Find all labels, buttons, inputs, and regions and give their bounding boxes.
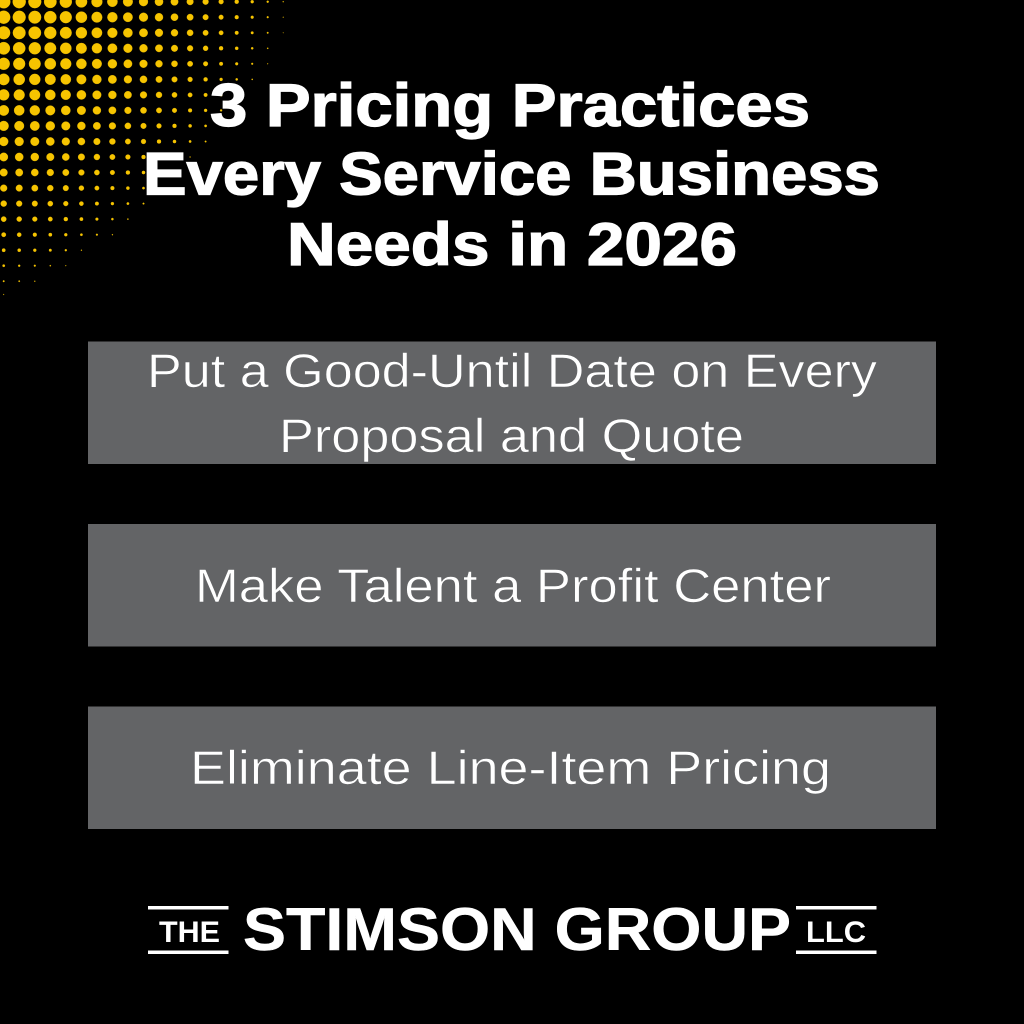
title: Needs in 2026 — [287, 211, 737, 278]
logo: The Stimson Group LLC: STIMSON GROUP — [243, 896, 791, 963]
halftone dot pattern — [0, 0, 284, 295]
title: Every Service Business — [143, 140, 880, 208]
logo: The Stimson Group LLC: THE — [159, 916, 220, 949]
panel: practice 3: Eliminate Line-Item Pricing — [190, 741, 831, 794]
panel: practice 1 — [88, 342, 936, 464]
title: 3 Pricing Practices — [210, 72, 810, 139]
panel: practice 1: Proposal and Quote — [279, 409, 744, 462]
panel: practice 3 — [88, 706, 936, 829]
logo: The Stimson Group LLC: LLC — [806, 916, 866, 949]
title — [143, 72, 880, 278]
panel: practice 2: Make Talent a Profit Center — [195, 559, 831, 612]
panel: practice 1: Put a Good-Until Date on Every — [147, 344, 878, 397]
panel: practice 2 — [88, 524, 936, 646]
